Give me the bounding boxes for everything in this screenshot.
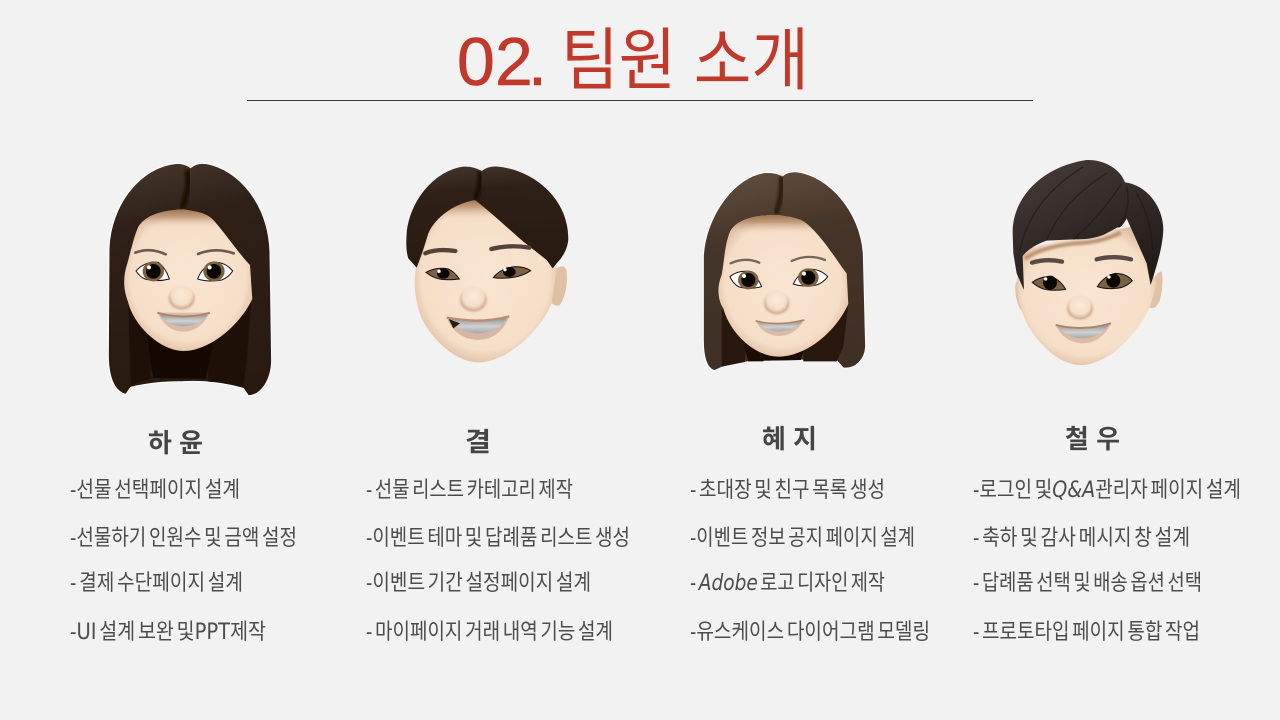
mouth <box>1056 323 1111 343</box>
name: 철우: 철 우 <box>1065 424 1120 454</box>
task list: 결: - 선물 리스트 카테고리 제작 <box>366 477 573 502</box>
avatar: 철우 <box>1013 160 1163 365</box>
task list: 혜지: - 초대장 및 친구 목록 생성 <box>690 477 885 502</box>
right eye <box>493 267 531 278</box>
task list: 결: -이벤트 테마 및 답례품 리스트 생성 <box>366 525 630 550</box>
task list: 하윤 <box>70 477 297 645</box>
nose <box>460 286 486 311</box>
right eye <box>198 261 233 281</box>
task list: 철우: - 프로토타입 페이지 통합 작업 <box>973 619 1200 644</box>
task list: 하윤: - 결제 수단페이지 설계 <box>70 570 243 595</box>
left brow <box>731 260 759 263</box>
right brow <box>792 257 825 261</box>
task list: 혜지: -유스케이스 다이어그램 모델링 <box>690 619 930 644</box>
title <box>457 23 809 100</box>
task list: 철우 <box>973 477 1241 644</box>
task list: 혜지 <box>690 477 930 644</box>
right eye <box>1097 273 1132 289</box>
task list: 결: - 마이페이지 거래 내역 기능 설계 <box>366 619 613 644</box>
ear <box>551 266 567 306</box>
task list: 결: -이벤트 기간 설정페이지 설계 <box>366 570 591 595</box>
right brow <box>198 250 234 254</box>
left brow <box>425 250 455 253</box>
right ear <box>1148 272 1163 308</box>
right brow <box>1097 257 1131 259</box>
title: 02. <box>457 24 547 100</box>
task list: 하윤: -UI 설계 보완 및PPT제작 <box>70 619 266 645</box>
avatar: 결 <box>406 167 568 362</box>
left ear <box>1015 278 1025 313</box>
name: 혜지: 혜 지 <box>762 424 817 454</box>
nose <box>169 285 194 309</box>
right brow <box>491 246 529 249</box>
nose <box>1067 295 1093 319</box>
task list: 결 <box>366 477 630 644</box>
task list: 혜지: - Adobe 로고 디자인 제작 <box>690 570 885 596</box>
task list: 철우: - 축하 및 감사 메시지 창 설계 <box>973 525 1190 550</box>
right eye <box>793 268 828 287</box>
avatar: 혜지 <box>703 172 866 371</box>
hair strands <box>1020 167 1153 277</box>
task list: 하윤: -선물 선택페이지 설계 <box>70 477 240 502</box>
nose <box>764 290 789 314</box>
mouth <box>756 320 804 336</box>
left brow <box>1032 260 1062 263</box>
left eye <box>426 268 459 280</box>
left eye <box>136 261 169 281</box>
name: 하윤: 하 윤 <box>148 428 203 458</box>
mouth <box>447 316 509 340</box>
task list: 혜지: -이벤트 정보 공지 페이지 설계 <box>690 525 915 550</box>
task list: 철우: -로그인 및Q&A관리자 페이지 설계 <box>973 477 1241 503</box>
name: 결: 결 <box>465 427 491 457</box>
task list: 하윤: -선물하기 인원수 및 금액 설정 <box>70 525 297 550</box>
mouth <box>157 313 210 332</box>
title: 팀원 소개 <box>561 23 809 99</box>
left eye <box>730 271 762 289</box>
left brow <box>135 250 166 254</box>
left eye <box>1032 276 1066 290</box>
avatar: 하윤 <box>108 163 272 396</box>
task list: 철우: - 답례품 선택 및 배송 옵션 선택 <box>973 570 1202 595</box>
